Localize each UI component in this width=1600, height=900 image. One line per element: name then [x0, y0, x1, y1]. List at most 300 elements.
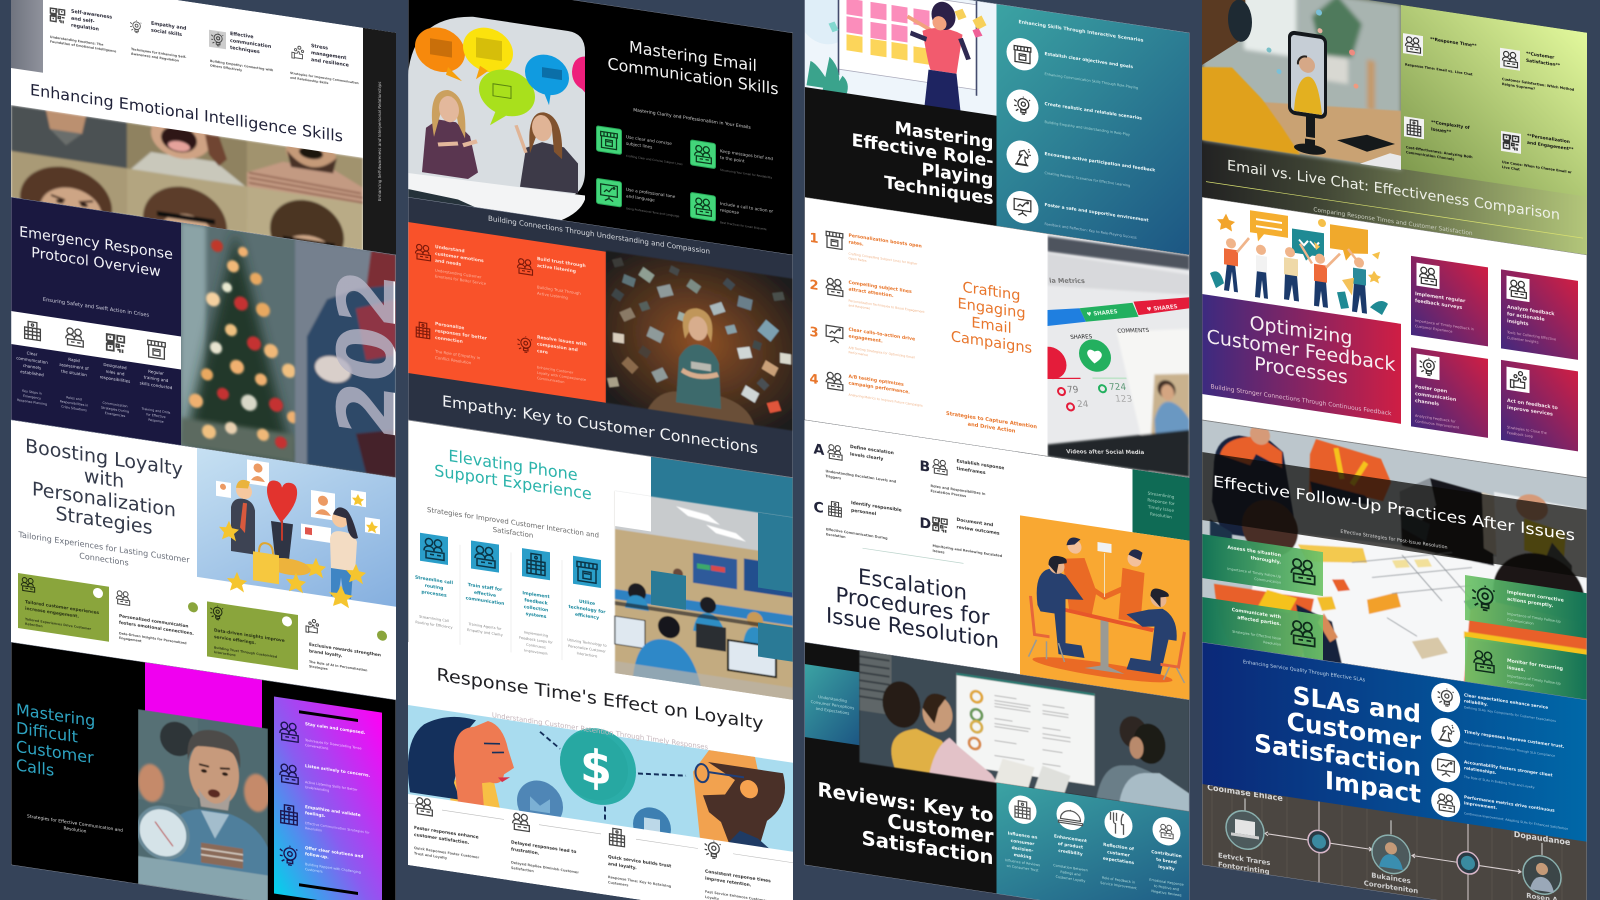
card heading: improve services: [1507, 405, 1553, 418]
stat 24: 24: [1077, 400, 1089, 410]
panel: escalation slide: [804, 420, 1190, 701]
point 3: relationships.: [1464, 765, 1497, 775]
icon: team: [21, 577, 35, 592]
white lower band: [408, 794, 793, 900]
node name 2: Bukainces: [1371, 871, 1411, 885]
factor 2: Enhancement: [1054, 833, 1087, 844]
caption 3: Performance: [848, 350, 868, 357]
subtitle: Mastering Clarity and Professionalism in Your Emails: [633, 107, 751, 131]
icon 3: [1404, 116, 1424, 139]
card caption: Analyzing Feedback for: [1415, 414, 1456, 424]
gradient title block: [1202, 294, 1401, 424]
title: Communication Skills: [608, 54, 778, 99]
red tab: [1134, 289, 1190, 323]
title: Satisfaction: [862, 827, 994, 869]
magenta block: [145, 662, 262, 730]
teal panel: [996, 4, 1190, 256]
icon: rewards: [306, 618, 319, 634]
card caption: Importance of Timely Follow-Up: [1507, 612, 1561, 624]
factor 1 caption: Influence of Reviews: [1005, 858, 1040, 867]
title: Calls: [16, 755, 54, 780]
icon C: [829, 501, 841, 517]
point 1 caption: Understanding Customer: [435, 269, 482, 280]
icon: [596, 178, 622, 207]
heading A: levels clearly: [850, 451, 883, 462]
factor 2 caption: Customer Loyalty: [1056, 875, 1085, 883]
title: Protocol Overview: [31, 245, 161, 280]
photo: woman filming on phone: [1202, 0, 1401, 170]
comments label: COMMENTS: [1117, 328, 1150, 335]
card 2 text: fosters emotional connections.: [119, 620, 194, 637]
icon: [1291, 558, 1315, 585]
title: Email: [971, 314, 1012, 337]
point 4 heading: care: [537, 348, 548, 356]
strategy 2: Train staff for: [468, 582, 503, 593]
label 4: training and: [144, 374, 169, 383]
node: hub 2: [1457, 850, 1479, 876]
tip 3 text: and language: [626, 193, 655, 203]
top-left node label: Cooimase Ehlace: [1207, 783, 1283, 803]
factor 2 caption: Customer Satisfaction: Which Method: [1502, 77, 1575, 92]
icon 1: [416, 244, 430, 261]
heading D: Document and: [956, 517, 993, 528]
card 3: [207, 601, 298, 670]
caption 1: Response Planning: [17, 398, 47, 406]
title: Strategies: [56, 502, 153, 539]
subtitle: Connections: [79, 551, 129, 568]
icon D: [933, 517, 947, 533]
node: hub 1: [1308, 829, 1330, 854]
title: Emergency Response: [19, 224, 173, 263]
title: with: [84, 464, 124, 493]
shares label: SHARES: [1070, 334, 1093, 341]
letter D: D: [920, 515, 931, 533]
card heading: Implement corrective: [1507, 589, 1564, 604]
point 2: Compelling subject lines: [848, 280, 912, 295]
card caption: Feedback Loop: [1507, 431, 1534, 439]
photo: call centre: [615, 491, 793, 701]
navy panel: [11, 197, 181, 446]
strategy 3: Implement: [522, 590, 550, 600]
label 3: responsibilities: [100, 374, 130, 384]
fact 2: frustration.: [511, 846, 540, 857]
item 2 heading: Listen actively to concerns.: [305, 763, 370, 778]
number 1: 1: [810, 231, 819, 247]
item 2 caption: Building Empathy and Understanding in Role-Play: [1044, 120, 1130, 137]
photo grid: stressed faces: [11, 105, 363, 250]
icon: [596, 126, 622, 155]
point 4: Performance metrics drive continuous: [1464, 794, 1555, 813]
panel: response time slide: [408, 642, 793, 900]
number 2: 2: [810, 278, 819, 294]
card heading: Analyze feedback: [1507, 304, 1555, 317]
tip 3: [596, 178, 680, 218]
icon 4: [1501, 131, 1521, 154]
tip 2: [690, 140, 773, 180]
card caption: Customer Experience: [1415, 324, 1452, 334]
card caption: Importance of Timely Follow-Up: [1227, 567, 1281, 579]
subtitle: Strategies for Effective Communication and: [27, 813, 123, 834]
icon: feedback: [522, 548, 550, 580]
heading B: Establish response: [956, 458, 1004, 471]
icon: cutlery: [1104, 808, 1132, 840]
point 3: Clear calls-to-action drive: [848, 327, 915, 343]
factor 3 caption: Cost-Effectiveness: Analyzing Both: [1406, 145, 1473, 159]
title: Engaging: [957, 295, 1026, 322]
left seated man: [1037, 567, 1084, 658]
icon circle 3: [1431, 751, 1460, 784]
red like circle: [1034, 344, 1066, 381]
tip 4 caption: Best Practices for Email Etiquette: [720, 220, 767, 231]
point 1 heading: and needs: [435, 258, 461, 268]
protocol captions: [17, 388, 171, 425]
title: Escalation: [858, 565, 967, 606]
letter A: A: [814, 441, 824, 459]
panel: phone support slide: [408, 420, 793, 701]
icon: technology: [573, 556, 601, 588]
panel: boosting loyalty slide: [11, 420, 396, 701]
card heading: thoroughly.: [1251, 555, 1281, 566]
point 3 caption: The Role of Empathy in: [434, 349, 481, 361]
icon circle 1: [1431, 681, 1460, 714]
title: Issue Resolution: [826, 603, 999, 654]
panel: email campaigns slide: [804, 197, 1190, 479]
panel: email vs chat slide: [1202, 0, 1587, 256]
caption 4: Training and Drills: [141, 406, 171, 415]
caption 4: Response: [148, 418, 164, 424]
title: Campaigns: [951, 328, 1032, 357]
number 4: 4: [810, 372, 819, 388]
skill 1 caption: Understanding Emotions: The: [50, 35, 104, 47]
callout text: Streamlining: [1148, 490, 1175, 500]
title: Effective Role-: [852, 131, 994, 172]
dashboard heading: ia Metrics: [1049, 277, 1085, 285]
right woman: [520, 139, 578, 196]
strategy 1 caption: Streamlining Call: [419, 615, 449, 623]
strategy 4: technology for: [569, 604, 606, 616]
caption D: Issues: [932, 549, 945, 554]
title: Mastering: [16, 700, 95, 731]
blue SLA panel: [1202, 642, 1587, 842]
item 2 icon: [1006, 87, 1038, 124]
icon: [690, 140, 716, 169]
point 1 heading: Understand: [435, 244, 465, 254]
skill 2 caption: Awareness and Regulation: [131, 52, 180, 63]
strategy 2 caption: Training Agents for: [468, 622, 502, 631]
letter B: B: [920, 458, 930, 476]
item 1 caption: Enhancing Communication Skills Through Role-Playing: [1044, 72, 1138, 90]
factor 1: making: [1014, 852, 1031, 861]
title: Impact: [1325, 766, 1421, 809]
subtitle: and Drive Action: [968, 421, 1016, 435]
card 4: [306, 618, 387, 680]
tip 1 text: Use clear and concise: [626, 134, 672, 146]
skill 2 caption: Techniques for Enhancing Self-: [131, 47, 187, 59]
point 2 caption: Building Trust Through: [537, 284, 581, 296]
point 2 heading: active listening: [537, 263, 576, 275]
point 2 caption: Measuring Customer Satisfaction Through SLA Compliance: [1464, 740, 1555, 758]
icon 3: [826, 325, 843, 344]
point 3 heading: connection: [435, 335, 463, 345]
card 4 caption: The Role of AI in Personalization: [309, 660, 368, 673]
arrow dot: [188, 602, 198, 613]
card 1 text: Tailored customer experiences: [25, 599, 99, 616]
arrow dot: [377, 630, 387, 641]
node name 1: Eetvck Trares: [1218, 851, 1270, 867]
strategy 1 caption: Routing for Efficiency: [415, 620, 453, 630]
title: Mastering: [895, 119, 993, 153]
panel heading: Enhancing Skills Through Interactive Scenarios: [1018, 19, 1144, 44]
caption 2: Responsibilities in: [60, 399, 88, 408]
point 1: rates.: [848, 239, 864, 248]
subtitle: Ensuring Safety and Swift Action in Crises: [43, 297, 149, 319]
icon circle 4: [1431, 786, 1460, 819]
factor 4 caption: Live Chat: [1502, 165, 1520, 172]
factor 3: expectations: [1103, 856, 1135, 866]
table: [1054, 606, 1154, 632]
number 3: 3: [810, 325, 819, 341]
subtitle: Strategies for Improved Customer Interaction and: [427, 506, 599, 540]
title: Customer: [887, 810, 994, 848]
skill 4 text: Stress: [311, 43, 328, 52]
card: open channels: [1411, 347, 1488, 438]
fact 1 caption: Trust and Loyalty: [414, 851, 448, 860]
item 4 caption: Feedback and Reflection: Key to Role-Playing Success: [1044, 222, 1137, 240]
card: corrective actions: [1465, 575, 1587, 638]
point 4 caption: Communication: [537, 376, 564, 384]
card 1 text: increase engagement.: [25, 606, 79, 620]
factor 1: decision-: [1012, 845, 1034, 854]
title: Crafting: [963, 279, 1020, 304]
tip 4: [690, 192, 773, 232]
factor 3: Reflection of: [1103, 842, 1134, 852]
tip 1: [596, 126, 683, 166]
item 2 caption: Understanding: [305, 785, 329, 793]
point 4 caption: Loyalty with Compassionate: [537, 371, 586, 382]
letter C: C: [814, 499, 824, 517]
photo: woman among scattered photographs: [606, 251, 793, 431]
title: Reviews: Key to: [818, 778, 994, 827]
fact 2: Delayed responses lead to: [511, 839, 576, 855]
card: monitor: [1465, 636, 1587, 701]
title: Techniques: [884, 173, 993, 209]
icon 2: [513, 813, 529, 832]
node: man: [1523, 853, 1561, 897]
icon circle 2: [1431, 716, 1460, 749]
card heading: feedback surveys: [1415, 298, 1462, 311]
card 3 caption: Building Trust Through Customized: [214, 645, 278, 659]
title: Effective Follow-Up Practices After Issues: [1213, 472, 1575, 545]
node: woman: [1372, 832, 1410, 876]
icon 1: [416, 797, 432, 816]
card 3 caption: Interactions: [214, 650, 236, 657]
caption 1: Emergency: [23, 394, 41, 401]
icon: listen: [280, 764, 298, 784]
icon 4: [518, 335, 532, 353]
point 3 heading: Personalize: [435, 321, 464, 331]
icon: [1472, 584, 1494, 612]
factor 3 caption: Service Improvement: [1100, 881, 1137, 890]
tip 2 caption: Structuring Your Email for Readability: [720, 168, 772, 180]
callout text: Response for: [1147, 497, 1175, 506]
card heading: actions promptly.: [1507, 596, 1553, 609]
point 4 heading: Resolve issues with: [537, 334, 587, 348]
icon 3: [610, 828, 624, 847]
skill 2 text: Empathy and: [151, 21, 187, 32]
green like circle: [1079, 337, 1111, 374]
stat rows: [1048, 366, 1133, 420]
white cutout and teal blocks: [615, 491, 793, 662]
card 2 text: Personalized communication: [119, 613, 188, 630]
skill 1 text: regulation: [71, 23, 100, 33]
heading C: Identify responsible: [851, 500, 902, 514]
icon 2: [826, 278, 843, 297]
side box text: Understanding: [818, 694, 847, 703]
strategy 1: routing: [425, 583, 443, 592]
icon 1: [826, 231, 843, 250]
icon: self-awareness: [50, 7, 65, 24]
step D: [920, 511, 1003, 563]
grey accent block: [11, 0, 43, 73]
icon: call routing: [420, 533, 448, 565]
worker: dark jacket: [1400, 474, 1494, 566]
card: assess: [1202, 534, 1323, 596]
illustration: personalization: [197, 448, 396, 615]
card caption: Importance of Timely Feedback in: [1415, 319, 1474, 331]
strategy 4 caption: Interactions: [577, 651, 598, 658]
title block: [804, 87, 996, 227]
strategy 3 caption: Improvement: [524, 648, 548, 656]
icon 3: [416, 322, 430, 339]
label 1: communication: [16, 355, 48, 365]
right orange figure: [1464, 597, 1587, 701]
subtitle: Satisfaction: [493, 526, 533, 540]
icon: building: [25, 321, 40, 341]
heading C: personnel: [851, 507, 877, 517]
card 1 caption: Retention: [25, 622, 43, 628]
label 3: Designated: [103, 362, 127, 370]
item 3 caption: Effective Communication Strategies for: [305, 821, 370, 835]
card: act on feedback: [1501, 360, 1578, 451]
skill 3 text: Effective: [230, 31, 254, 40]
skill 4 caption: and Relationship Skills: [290, 75, 329, 85]
subtitle: Building Stronger Connections Through Continuous Feedback: [1211, 383, 1392, 417]
strategy 3: feedback: [524, 597, 549, 607]
item 3 caption: Creating Realistic Scenarios for Effective Learning: [1044, 171, 1130, 188]
skill 1 text: Self-awareness: [71, 9, 112, 21]
left woman: [422, 117, 478, 180]
icon: assessment: [66, 327, 83, 347]
factor 2 caption: Reigns Supreme?: [1502, 82, 1535, 91]
card 3 text: Data-driven insights improve: [214, 627, 285, 644]
title: Optimizing: [1250, 311, 1352, 350]
strategy 2: communication: [466, 595, 504, 607]
skill 4 text: and resilience: [311, 57, 350, 69]
icon: [1474, 650, 1494, 673]
title: Personalization: [32, 477, 176, 522]
panel: role-playing slide: [798, 0, 1190, 256]
strategy 3: systems: [526, 611, 547, 620]
skill 3 text: communication: [230, 38, 272, 50]
skill 1 caption: Foundation of Emotional Intelligence: [50, 39, 117, 54]
right seated man: [1126, 603, 1177, 677]
card 3 text: service offerings.: [214, 634, 256, 646]
factor 1 caption: Response Time: Email vs. Live Chat: [1405, 62, 1473, 77]
green tab: [1080, 295, 1138, 330]
panel: reviews slide: [804, 642, 1190, 900]
photo: christmas tree bokeh: [181, 222, 396, 478]
factor 4: and Engagement**: [1527, 140, 1574, 153]
item 1 heading: Stay calm and composed.: [305, 721, 366, 735]
tab label green: ♥ SHARES: [1086, 308, 1118, 318]
label 4: skills conducted: [140, 380, 173, 390]
item 4 heading: Offer clear solutions and: [305, 845, 363, 859]
caption 2: Personalization Techniques to Boost Engagement: [848, 299, 925, 314]
card heading: issues.: [1507, 665, 1525, 674]
illustration: team with speech bubbles: [1210, 202, 1388, 317]
green callout: [1132, 469, 1190, 541]
subtitle: Comparing Response Times and Customer Satisfaction: [1313, 207, 1473, 237]
title: Enhancing Emotional Intelligence Skills: [30, 81, 343, 146]
skills row: [50, 4, 359, 90]
panel: SLA slide: [1202, 642, 1587, 900]
papers: [1298, 538, 1367, 571]
caption B: Roles and Responsibilities in: [931, 484, 986, 496]
skill 4 text: management: [311, 50, 347, 61]
strategy 1: Streamline call: [415, 575, 453, 586]
icon: stay calm: [280, 722, 298, 742]
strategy 3 caption: Feedback Loops for: [519, 636, 553, 645]
icon: [690, 192, 716, 221]
caption 1: Crafting Compelling Subject Lines for Higher: [848, 252, 918, 266]
card 4 text: Exclusive rewards strengthen: [309, 642, 381, 658]
card caption: Importance of Timely Follow-Up: [1507, 674, 1561, 686]
title: Customer Feedback: [1207, 325, 1395, 376]
tip 3 caption: Using Professional Tone and Language: [626, 206, 680, 218]
podium and bag: [267, 555, 311, 578]
stars: [219, 519, 366, 611]
fact 3 caption: Customers: [608, 880, 628, 887]
worker: right: [1494, 492, 1587, 580]
heart figure: [267, 479, 297, 525]
caption 3: Communication: [102, 401, 128, 408]
step A: [814, 438, 897, 489]
item 3 heading: Empathize and validate: [305, 804, 361, 817]
icon: empathize: [281, 804, 297, 825]
point 2 heading: Build trust through: [537, 256, 586, 269]
title: SLAs and: [1293, 681, 1421, 729]
title: Response Time's Effect on Loyalty: [437, 665, 764, 734]
strategy 4: Utilize: [579, 599, 595, 607]
icon: stress: [292, 45, 304, 60]
orange panel: [408, 222, 606, 403]
icon: training: [148, 340, 165, 359]
panel: emotional intelligence slide: [11, 0, 396, 255]
caption B: Escalation Process: [931, 489, 966, 498]
factor 3: **Complexity of: [1431, 119, 1470, 131]
item 1 caption: Conversations: [305, 743, 329, 751]
arrow dot: [282, 616, 292, 627]
caption 1: Key Steps in: [22, 389, 42, 396]
seated figure hair: [1242, 496, 1298, 560]
fact 3 caption: Response Time: Key to Retaining: [608, 875, 672, 889]
panel: difficult calls slide: [11, 642, 396, 900]
factor 3 caption: Communication Channels: [1406, 150, 1454, 162]
point 2 caption: Active Listening: [537, 291, 568, 300]
factor 2 caption: Correlation Between: [1053, 863, 1088, 872]
fact 2 caption: Delayed Replies Diminish Customer: [511, 860, 579, 875]
subtitle: Resolution: [64, 825, 87, 835]
